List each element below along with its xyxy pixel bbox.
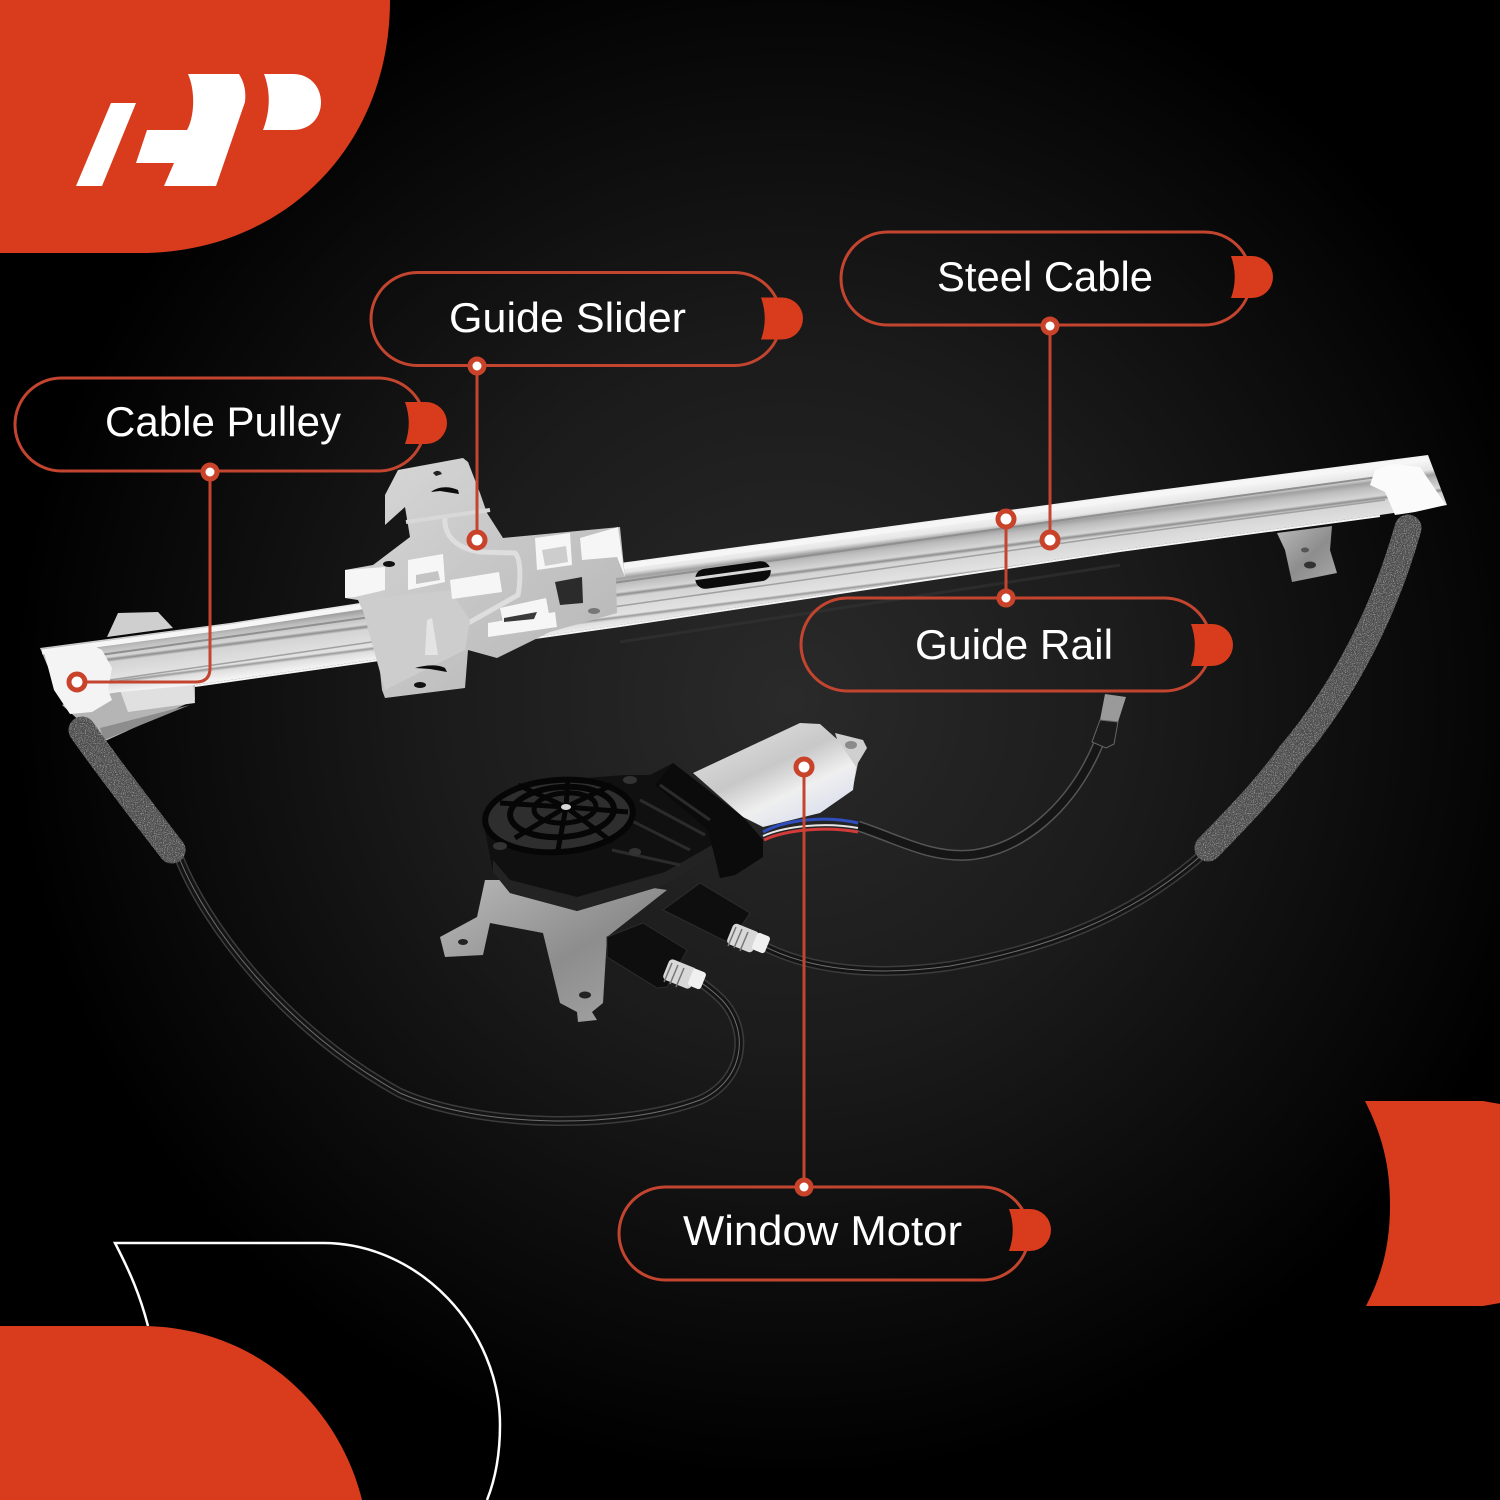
left rail lower plate	[62, 682, 195, 742]
rail slot	[694, 560, 772, 590]
gearbox housing	[481, 763, 763, 911]
reflections under rail	[620, 565, 1120, 642]
left cable pulley	[44, 644, 112, 714]
left rail upper tab	[107, 612, 173, 637]
label: Guide Slider: Guide Slider	[449, 294, 686, 341]
decor: bottom-left red shape	[0, 1326, 362, 1500]
guide slider bracket	[345, 458, 625, 698]
decor: bottom-left white outline	[115, 1243, 500, 1500]
cable housings	[607, 883, 750, 988]
callout: Steel Cable	[841, 232, 1273, 548]
right cable	[758, 852, 1205, 971]
slider clips	[345, 527, 625, 637]
label: Guide Rail: Guide Rail	[915, 621, 1113, 668]
wire connector	[1092, 694, 1126, 748]
left cable	[178, 855, 739, 1121]
callout: Guide Slider	[371, 272, 803, 548]
motor mounting plate	[440, 880, 667, 1022]
decor: top-left red corner with logo	[0, 0, 390, 253]
callout: Guide Rail	[801, 511, 1233, 691]
decor: right red shape	[1365, 1101, 1500, 1306]
cable ferrules	[662, 923, 771, 990]
window regulator product illustration	[40, 455, 1447, 1121]
label: Steel Cable: Steel Cable	[937, 253, 1153, 300]
left foam sleeve	[82, 730, 172, 850]
right foam sleeve	[1208, 528, 1408, 848]
callout: Window Motor	[619, 759, 1051, 1280]
right rail mounting tab	[1277, 526, 1337, 582]
motor wiring harness	[763, 745, 1098, 855]
callout: Cable Pulley	[15, 378, 447, 690]
gear disc	[481, 773, 637, 859]
label: Window Motor: Window Motor	[683, 1207, 962, 1254]
guide rail	[40, 455, 1447, 700]
logo	[76, 74, 321, 186]
right cable pulley	[1370, 464, 1446, 515]
motor cylinder	[693, 723, 867, 827]
label: Cable Pulley: Cable Pulley	[105, 398, 341, 445]
